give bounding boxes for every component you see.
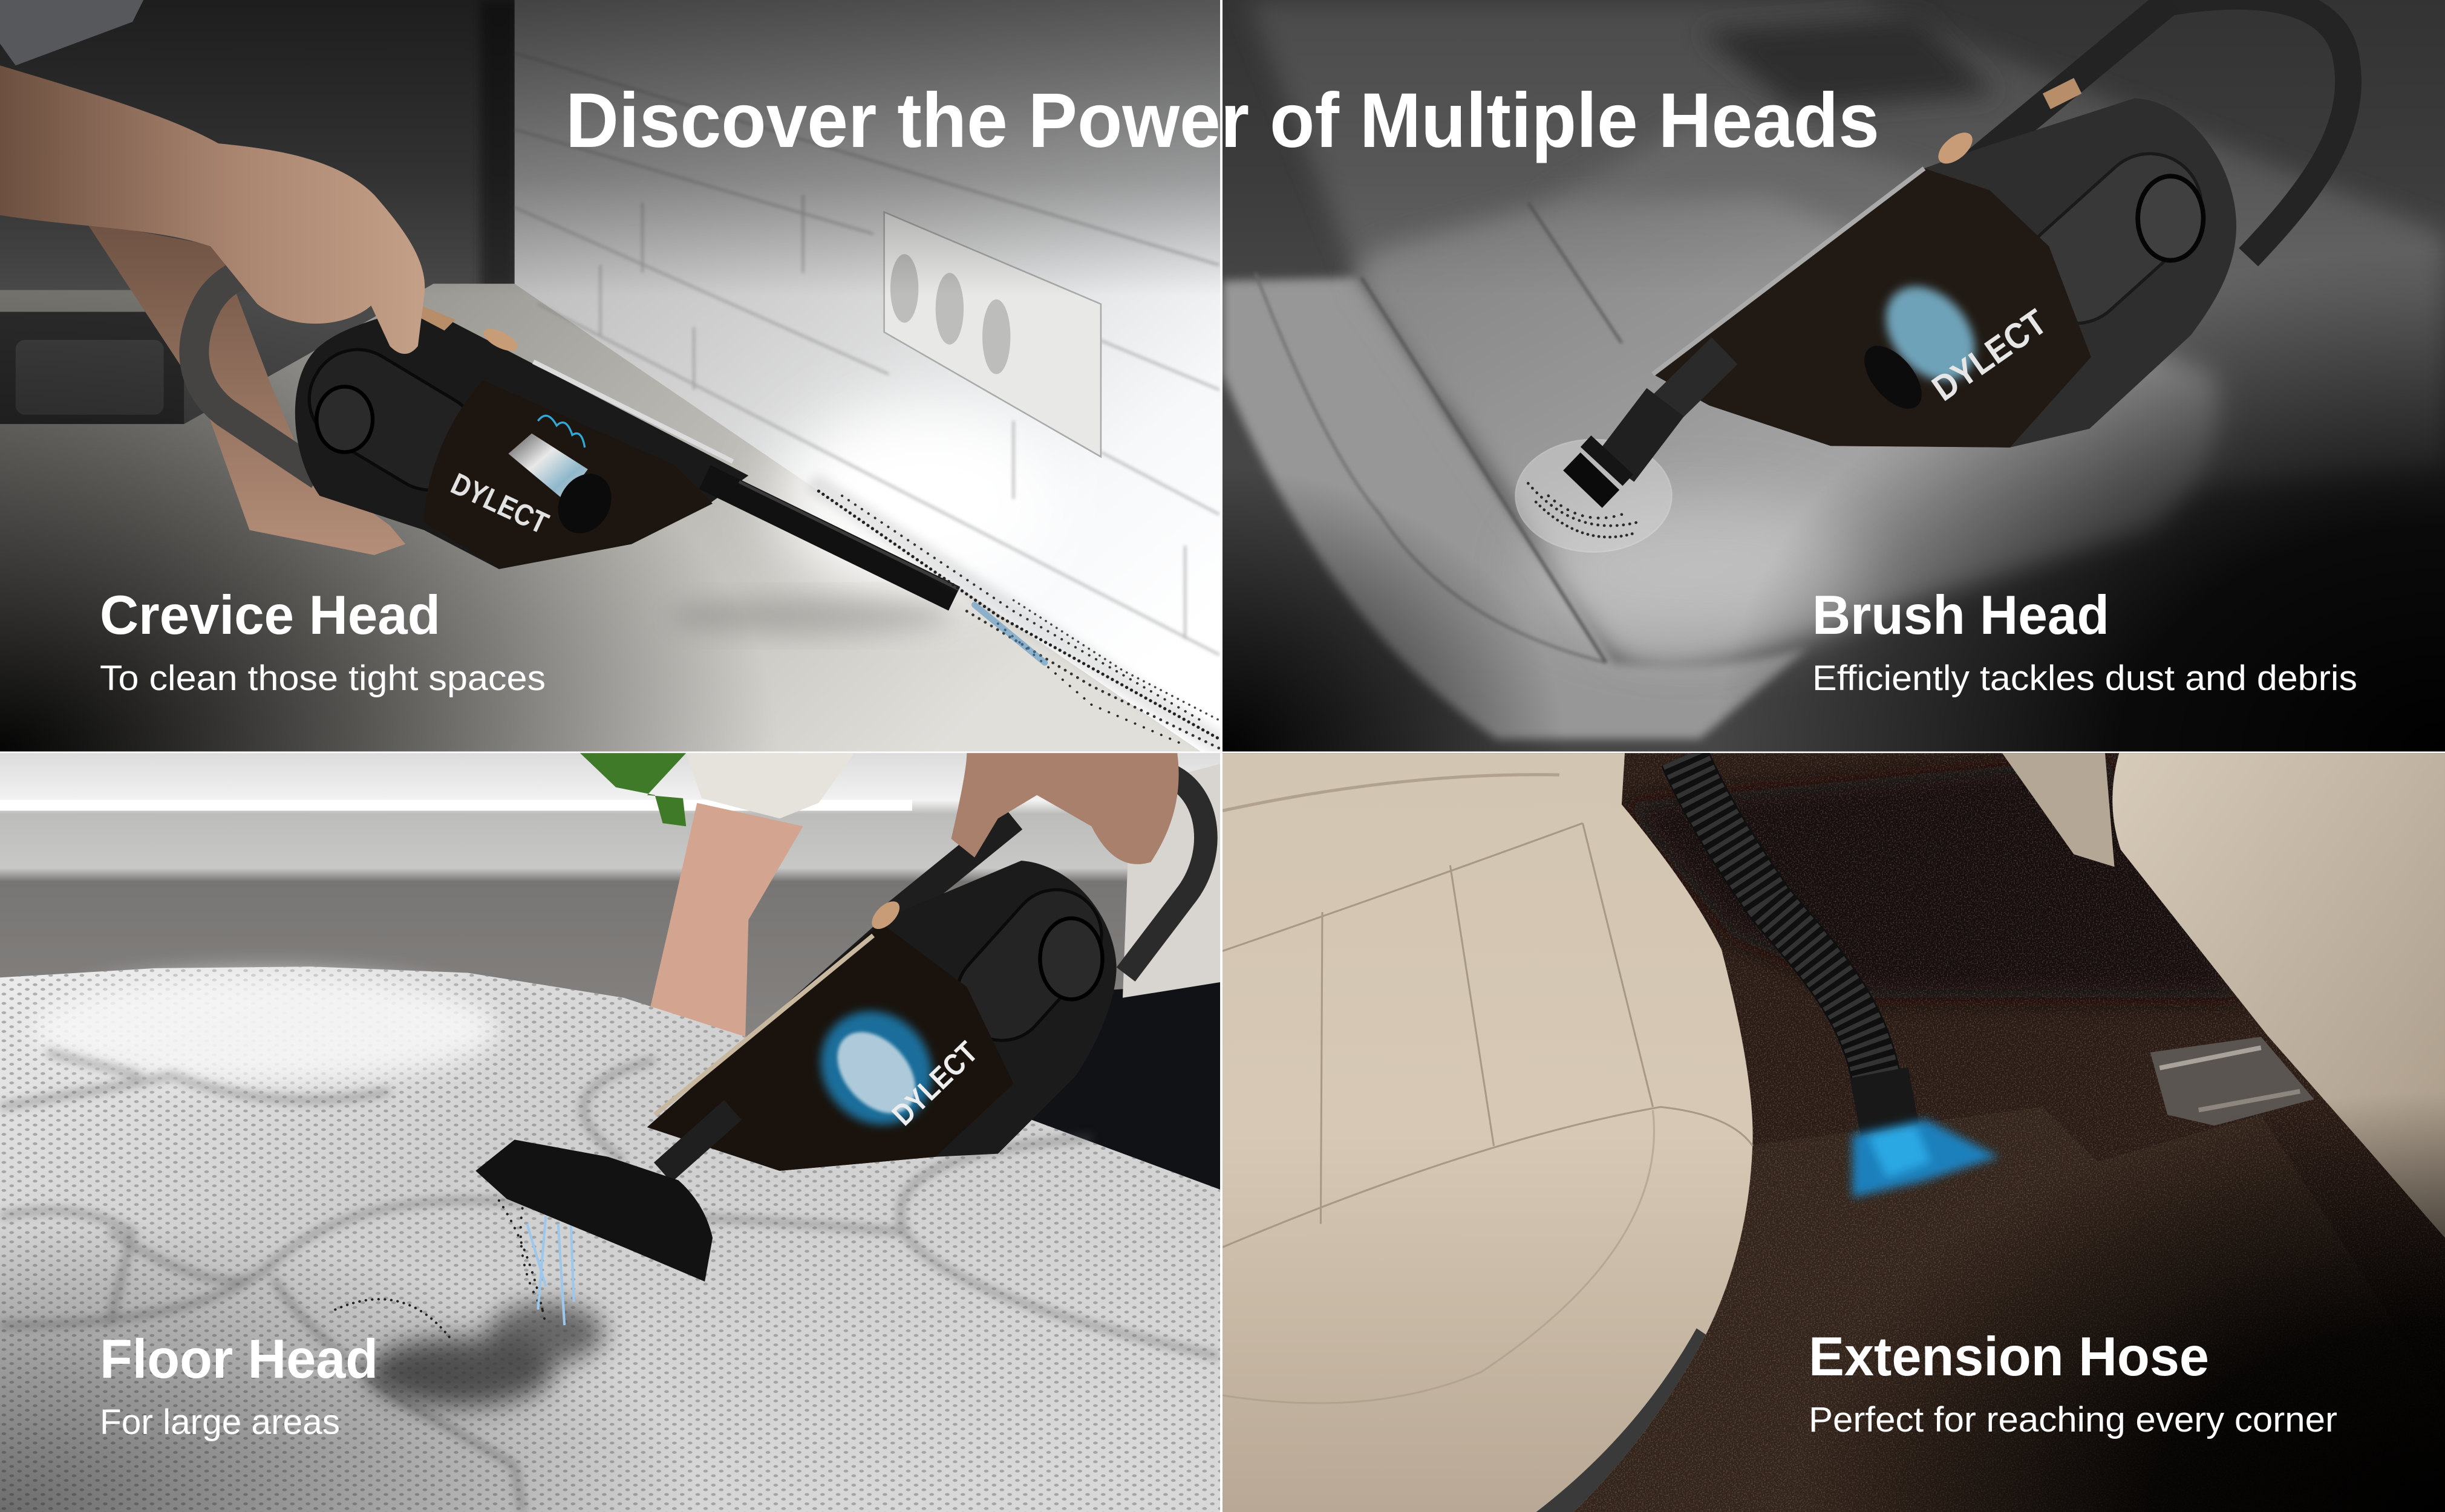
floor head attachment: [475, 1110, 733, 1282]
cup highlight: [534, 362, 733, 461]
seat cushion: [1357, 195, 2220, 669]
filter cap: [547, 464, 622, 543]
control plate: [2003, 132, 2222, 345]
dust cup: [1653, 168, 2091, 448]
control plate: [938, 871, 1120, 1059]
heading: Extension Hose: [1809, 1326, 2209, 1387]
trousers: [998, 982, 1220, 1201]
seat rail: [2150, 1037, 2314, 1126]
label: extension hose: [1809, 1326, 2337, 1439]
panel: extension hose: [1222, 753, 2445, 1512]
brick wall: [515, 0, 1220, 751]
air rays: [527, 1216, 574, 1325]
copper button: [867, 896, 904, 934]
carpet texture: [1222, 753, 2445, 1512]
top shade: [1222, 0, 2445, 296]
brick mortar lines: [515, 53, 1219, 655]
carpet base: [1222, 753, 2445, 1512]
label: brush head: [1812, 585, 2357, 698]
filter: [1868, 269, 1993, 399]
countertop: [0, 284, 1232, 751]
airflow arcs: [538, 415, 585, 448]
handle loop: [2158, 0, 2348, 257]
vacuum body: [1653, 0, 2236, 448]
vacuum body: [292, 304, 748, 569]
dirt stain: [367, 1302, 605, 1406]
hand: [951, 753, 1179, 864]
seat bolster: [1222, 278, 1809, 739]
hose nozzle: [1879, 1073, 1890, 1130]
title: Discover the Power of Multiple Heads: [566, 77, 1879, 164]
filter: [822, 1017, 931, 1128]
bottom right vignette: [1793, 1091, 2445, 1512]
copper button: [1933, 127, 1978, 169]
seat top roll: [1222, 775, 1559, 810]
description: To clean those tight spaces: [100, 659, 546, 698]
kitchen backdrop: [0, 0, 1220, 751]
bright area: [31, 974, 499, 1084]
hose: [1684, 756, 1878, 1084]
panel: floor head: [0, 753, 1220, 1512]
body shell: [1709, 98, 2236, 448]
power button: [1040, 918, 1103, 999]
panel: crevice head: [0, 0, 1232, 751]
wall socket: [884, 212, 1101, 457]
bottom left vignette: [0, 281, 780, 751]
heading: Crevice Head: [100, 585, 440, 646]
panel: brush head: [1222, 0, 2445, 751]
handle loop: [194, 263, 408, 475]
description: Efficiently tackles dust and debris: [1812, 659, 2357, 698]
console detail: [1700, 16, 1996, 109]
filter: [508, 434, 588, 500]
logo: DYLECT: [1925, 301, 2054, 409]
dark wall column: [480, 0, 518, 288]
handle loop: [1126, 775, 1206, 974]
upper arm and fist: [0, 65, 425, 354]
cushion highlight: [1528, 499, 1871, 639]
mattress texture: [0, 966, 1220, 1512]
window and wall: [0, 753, 1220, 1091]
bottom left shade: [0, 1216, 702, 1512]
filter glow: [798, 988, 955, 1147]
description: Perfect for reaching every corner: [1809, 1400, 2337, 1439]
label: crevice head: [100, 585, 546, 698]
mattress tufts: [0, 1052, 1219, 1512]
dirt specks: [335, 1201, 546, 1341]
cleaned patch: [1516, 440, 1671, 552]
carpet mat: [1559, 1107, 2445, 1512]
seat panel fragment: [2002, 753, 2114, 867]
right sleeve: [1123, 764, 1220, 998]
shirt sleeve: [0, 0, 143, 65]
vacuum body: [647, 818, 1120, 1171]
logo: DYLECT: [886, 1035, 984, 1132]
power button: [2138, 176, 2203, 260]
brush attachment: [1572, 351, 1725, 499]
backrest tones: [1247, 0, 2445, 515]
debris: [818, 486, 1219, 748]
description: For large areas: [100, 1403, 340, 1442]
sleeve: [686, 753, 855, 818]
heading: Floor Head: [100, 1329, 378, 1390]
sink: [0, 290, 184, 424]
window frame highlight: [0, 800, 912, 810]
wall light glow: [780, 405, 1060, 593]
seat base shadow: [1536, 1328, 1706, 1512]
mattress: [0, 966, 1220, 1512]
bottom right vignette: [1715, 249, 2445, 751]
car interior backdrop: [1222, 0, 2445, 751]
blue airflow: [1852, 1119, 1999, 1198]
body shell: [295, 304, 748, 569]
dust cup: [424, 380, 713, 569]
cup highlight: [655, 936, 873, 1115]
logo: DYLECT: [446, 466, 553, 541]
label: floor head: [100, 1329, 378, 1442]
copper slider: [415, 305, 455, 330]
heading: Brush Head: [1812, 585, 2109, 646]
neck: [889, 818, 1014, 920]
carpet upper shadow: [1622, 756, 2245, 998]
crevice nozzle: [705, 477, 959, 599]
filter cap: [1853, 336, 1933, 419]
control plate: [292, 332, 495, 507]
copper slider: [2043, 78, 2081, 109]
copper button: [480, 324, 521, 355]
dust cup: [647, 923, 1014, 1171]
neck: [1968, 0, 2170, 168]
seat panel seams: [1222, 823, 1752, 1403]
plant: [580, 753, 686, 826]
cup highlight: [1653, 168, 1924, 374]
floor shadow: [670, 597, 951, 634]
top shade: [0, 0, 1220, 296]
power button: [316, 386, 373, 452]
lower arm and hand: [86, 221, 405, 555]
seat stitching: [1255, 203, 1622, 663]
upper cushion: [1544, 109, 2027, 405]
dirt specks: [1528, 483, 1637, 537]
body shell: [647, 861, 1117, 1171]
right seat back: [2112, 753, 2445, 1238]
forearm: [647, 803, 803, 1037]
bottom left vignette: [1222, 468, 1565, 751]
front seat: [1222, 753, 1753, 1512]
